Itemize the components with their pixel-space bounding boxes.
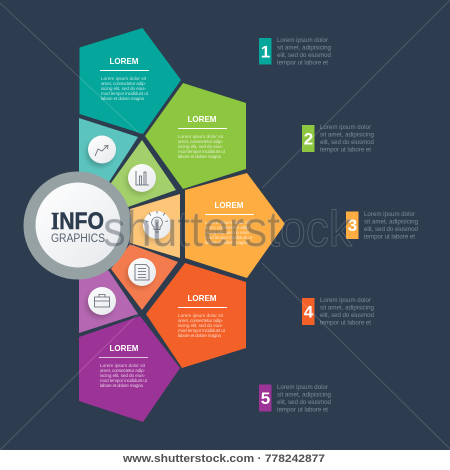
legend item 1: tempor ut labore et [277,60,328,66]
text: red body: iscing elit, sed do eius- [178,323,223,328]
legend item 5 [259,384,332,414]
panel: light purple segment [79,260,138,333]
icon: document [126,258,156,289]
text: green body: amet, consectetur adip- [178,139,223,144]
heading: orange: LOREM [214,200,244,210]
legend item 1 [259,37,332,66]
legend item 3: 3 [348,216,357,235]
legend item 1: elit, sed do eiusmod [277,52,332,59]
text: orange body: labore et dolore magna [205,240,248,245]
text: teal body: labore et dolore magna [101,96,144,101]
legend item 2: tempor ut labore et [320,146,371,154]
panel: red [146,263,246,368]
text: red body: labore et dolore magna [178,333,221,338]
text: purple body: iscing elit, sed do eius- [100,373,145,378]
text: purple body: mod tempor incididunt ut [100,378,148,383]
legend item 4: elit, sed do eiusmod [320,312,375,319]
legend item 2: sit amet, adipisicing [320,132,375,138]
legend item 4 [302,297,375,326]
subtitle: GRAPHICS: GRAPHICS [51,233,105,245]
legend item 5: elit, sed do eiusmod [277,399,332,406]
heading: teal: LOREM [110,56,138,66]
watermark: shutterstock [103,201,353,257]
legend item 1: Lorem ipsum dolor [277,37,328,44]
legend item 3: Lorem ipsum dolor [364,211,415,218]
legend item 3: tempor ut labore et [364,234,415,240]
icon: bar chart [126,164,156,195]
icon: briefcase [86,287,116,318]
text: teal body: Lorem ipsum dolor sit [101,76,147,81]
text: orange body: mod tempor incididunt ut [205,235,253,240]
text: red body: mod tempor incididunt ut [178,328,226,333]
text: teal body: iscing elit, sed do eius- [101,86,146,91]
legend item 3 [346,211,419,240]
panel: green [145,83,246,189]
text: red body: amet, consectetur adip- [178,318,223,323]
legend item 5: sit amet, adipisicing [277,392,332,398]
title: INFO: INFO [51,208,104,235]
legend item 5: tempor ut labore et [277,406,328,414]
footer bar [0,450,450,470]
center badge [24,172,132,280]
text: orange body: Lorem ipsum dolor sit [205,220,251,225]
heading: red: LOREM [188,293,216,303]
text: green body: labore et dolore magna [178,154,221,159]
footer text: www.shutterstock.com · 778242877 [122,453,325,465]
icon: line chart [86,136,116,167]
panel: light orange segment [130,194,180,258]
legend item 5: 5 [261,389,270,408]
text: green body: Lorem ipsum dolor sit [178,134,224,139]
legend item 2: Lorem ipsum dolor [320,124,371,131]
panel: orange [185,173,285,278]
legend item 4: 4 [304,302,314,322]
panel: light teal segment [79,118,138,190]
text: purple body: Lorem ipsum dolor sit [100,363,146,368]
text: purple body: labore et dolore magna [100,383,143,388]
legend item 2 [302,124,375,154]
legend item 4: sit amet, adipisicing [320,304,375,312]
legend item 5: Lorem ipsum dolor [277,384,328,391]
panel: teal [80,28,181,134]
legend item 4: Lorem ipsum dolor [320,297,371,304]
legend item 1: sit amet, adipisicing [277,44,332,52]
legend item 3: sit amet, adipisicing [364,218,419,226]
text: red body: Lorem ipsum dolor sit [178,313,224,318]
text: teal body: mod tempor incididunt ut [101,91,149,96]
icon: light bulb [141,211,171,242]
text: purple body: amet, consectetur adip- [100,368,145,373]
text: green body: iscing elit, sed do eius- [178,144,223,149]
panel: salmon segment [111,244,178,310]
text: green body: mod tempor incididunt ut [178,149,226,154]
legend item 2: 2 [304,130,313,148]
text: orange body: amet, consectetur adip- [205,225,250,230]
panel: light green segment [111,140,176,207]
heading: purple: LOREM [110,343,138,353]
legend item 4: tempor ut labore et [320,320,371,326]
legend item 3: elit, sed do eiusmod [364,226,419,233]
heading: green: LOREM [188,114,216,124]
legend item 1: 1 [261,42,270,62]
legend item 2: elit, sed do eiusmod [320,139,375,146]
panel: purple [79,316,180,422]
text: teal body: amet, consectetur adip- [101,81,146,86]
text: orange body: iscing elit, sed do eius- [205,230,250,235]
